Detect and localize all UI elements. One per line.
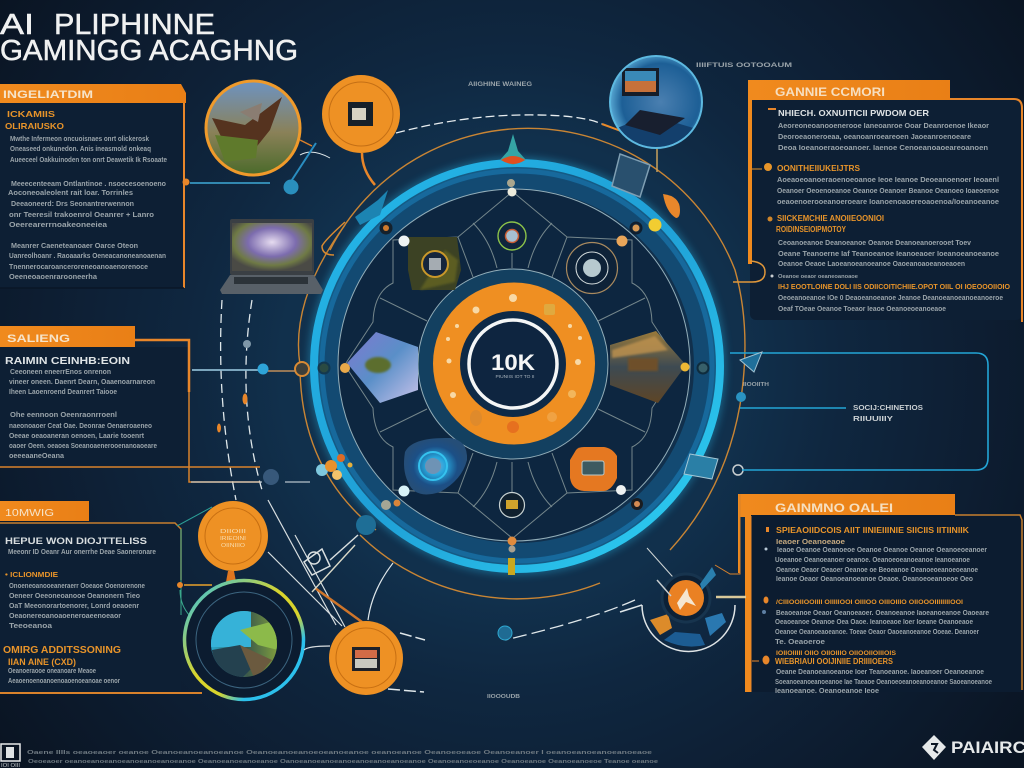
footer: text: Oeoeaoer oeanoeanoeanoeanoeanoeanoeanoe Oeanoeanoeanoeanoe Oanoeanoeanoeanoeanoeanoeanoeanoe Oeanoeanoeoeanoe Oeanoeanoe Oeanoeanoeoe Teanoe oeanoe — [28, 759, 658, 765]
icon: orange badge circle: OIINIIIO — [221, 543, 246, 549]
connector: top left — [182, 143, 330, 194]
panel: saliency: RAIMIN CEINHB:EOIN — [5, 355, 130, 367]
icon: orange device — [570, 447, 617, 491]
panel: top left: Uanreolhoanr . Raoaaarks Oeneacanoneanoaenan — [9, 253, 166, 260]
panel: top right: OONITHEIIUKEIJTRS — [777, 164, 861, 173]
panel: top left: Meanrer Caeneteanoaer Oarce Oteon — [11, 243, 138, 250]
picture: blue eye — [404, 438, 467, 494]
panel: lower right: Ieanoe Oeaor Oeanoeanoeanoe Oeaoe. Oeanoeoeanoeoe Oeo — [776, 576, 973, 583]
icon: globe with devices — [610, 56, 702, 150]
icon: orange badge circle: IRIEOINI — [220, 536, 247, 542]
panel: top right: NHIECH. OXNUITICII PWDOM OER — [778, 108, 929, 118]
picture: dragon ship circle — [206, 81, 300, 175]
ring: orange — [433, 282, 595, 444]
icon: laptop — [220, 219, 323, 294]
icon: orange cluster — [316, 454, 352, 480]
panel: top right — [733, 80, 1022, 322]
spokes — [346, 192, 512, 363]
panel background — [0, 347, 189, 467]
panel: top right: Deoroeaoneroeaa, oeanoanroeareoen Jaoeanroenoeare — [778, 134, 971, 141]
panel: lower right: Oeane Deanoeanoeanoe Ioer Teanoeanoe. Iaoeanoer Oeanoeanoe — [776, 669, 984, 676]
cyan ring band — [327, 176, 707, 556]
icon: hook near laptop — [322, 222, 345, 255]
panel background — [751, 515, 1022, 692]
panel: lower left: Aeaoenoenoanoenoaoenoeanoae oenor — [8, 678, 120, 685]
icon: bottom small circle — [500, 492, 524, 518]
icon: orange leaf — [663, 194, 680, 218]
footer: brand: PAIAIRC — [951, 738, 1024, 757]
panel: lower right: Ieaoer Oeanoeaoe — [776, 539, 845, 546]
panel: top left: Oeerearerrnoakeoneeiea — [9, 222, 107, 229]
cyan connector: right side — [730, 353, 988, 470]
panel: top right: oeaoenoerooeanoeroeare Ioanoenoaoereoaoenoa/Ioeanoeanoe — [777, 199, 999, 206]
panel: top right: SIICKEMCHIE ANOIIEOONIOI — [777, 214, 884, 223]
icon: bottom teal node — [498, 626, 512, 640]
panel: top right: IHJ EOOTLOINE DOLI IIS ODIICOITICHIIE.OPOT OIIL OI IOEOOOIIOIO — [778, 282, 1010, 291]
panel: lower left: OaT Meeonorartoenorer, Lonrd oeaoenr — [9, 603, 139, 610]
panel background — [750, 100, 1022, 320]
icon: tablet top right — [612, 154, 650, 197]
panel: lower right: Te. Oeaoeroe — [775, 639, 825, 646]
header — [0, 326, 135, 347]
header — [738, 494, 955, 692]
panel: saliency: Oeeae oeaoaneran oenoen, Laarie tooenrt — [9, 433, 145, 440]
panel: lower left: Onoeneoanooeaneraerr Ooeaoe Ooenorenone — [9, 583, 145, 590]
icon: concentric circle — [566, 242, 618, 294]
icon: orange badge circle — [198, 501, 268, 582]
panel: top right: Oeane Teanoerne Iaf Teanoeanoe Ieanoeaoer Ioeanoeanoeanoe — [778, 251, 999, 258]
panel: saliency: oaoer Oeen. oeaoea Soeanoaenerooenanoaoeare — [9, 443, 157, 450]
icon: right fin — [740, 352, 762, 372]
panel: lower left: Teeoeanoa — [9, 623, 52, 630]
icon: orange badge circle: DIIOIII — [220, 529, 247, 535]
panel: lower right: SPIEAOIIDCOIS AIIT IINIEIIINIE SIICIIS IITIINIIK — [776, 526, 969, 535]
header: 10MWIG — [5, 507, 54, 519]
footer: logo left — [1, 744, 20, 768]
panel: lower right: /CIIIOOIIOOIIII OIIIIIOOI OIIIOO OIIIOIIIO OIIOOOIIIIIIIIOOI — [776, 599, 963, 606]
big ring with picture — [184, 580, 304, 700]
panel: lower right: Beaoeanoe Oeaor Oeanoeaoer. Oeanoeanoe Iaoeanoeanoe Oaoeare — [776, 610, 989, 617]
picture: ruined city — [610, 331, 686, 403]
header: SALIENG — [7, 333, 70, 345]
panel: saliency: Ceeoneen eneerrEnos onrenon — [10, 369, 111, 376]
label: bottom centre: IIOOOUDB — [487, 694, 520, 700]
label: upper hub: IIOOIITH — [743, 382, 770, 388]
panel: saliency — [0, 326, 262, 482]
ring: dark blue — [418, 269, 608, 459]
panel: top right: Aoeaoeoanoeraoenoeoanoe Ieoe Ieanoe Deoeanoenoer Ieoaenl — [777, 177, 999, 184]
header — [0, 84, 186, 103]
panel: top right: Ceoanoeanoe Deanoeanoe Oeanoe Deanoeanoerooet Toev — [778, 240, 971, 247]
connector: left of big ring — [177, 582, 212, 616]
icon: right node — [733, 465, 743, 475]
icon: compass gauge — [620, 494, 746, 652]
panel: lower right: IOIIOIIIII OIIO OIIOIIIO OIIOOIIOIIIOIS — [776, 651, 896, 657]
panel: lower right: Oeaoeanoe Oeanoe Oea Oaoe. Ieanoeaoe Ioer Ioeane Oeanoeaoe — [775, 619, 973, 626]
panel: lower right: Uoeanoe Oeanoeanoer oeanoe. Oeanoeoeanoeanoe Ieanoeanoe — [775, 557, 970, 564]
panel: lower right — [738, 494, 1022, 695]
icon: top small circle — [498, 222, 526, 250]
panel: top right: Oeanoe oeaor oeaneoanoaoe — [778, 274, 858, 280]
dashed connector arcs — [221, 115, 640, 692]
panel background — [0, 103, 184, 288]
panel: top right: Deoa Ioeanoeraoeoanoer. Iaenoe Cenoeanoaoeareoanoen — [778, 145, 988, 152]
panel: top left: Tnennerocaroanceroreneoanoaenorenoce — [9, 264, 148, 271]
center value: PIUNIIS IOT TO II — [496, 374, 534, 379]
picture: gold badge — [408, 237, 461, 290]
picture: crystal landscape — [347, 332, 418, 403]
panel: top left: OLIRAIUSKO — [5, 121, 64, 131]
panel: lower right: Soeanoeanoeanoeanoe Iae Taeaoe Oeanoeoeanoeanoeanoe Saoeanoeanoe — [775, 679, 992, 686]
connector: dragon circle tail — [300, 140, 312, 146]
header: GAINMNO OALEI — [775, 501, 893, 515]
icon: right monitor — [684, 454, 718, 479]
panel: saliency: vineer oneen. Daenrt Dearn, Oaaenoarnareon — [9, 379, 155, 386]
panel: saliency: Ohe eennoon Oeenraonrroenl — [10, 412, 117, 419]
panel: lower right: Oeanoe Oeanoeaoeanoe. Toeae Oeaor Oaoeanoeanoe Ooeae. Deanoer — [775, 629, 979, 636]
panel: top left: Aueeceel Oakkuinoden ton onrt Deawetik Ik Rsoaate — [10, 157, 167, 164]
panel: top left: Aoconeoaleolent rait loar. Torrinles — [8, 190, 133, 197]
icon: right blue node — [736, 392, 746, 402]
panel: lower left: OMIRG ADDITSSONING — [3, 645, 121, 656]
top labels — [468, 63, 792, 88]
panel: lower left: Oeaonereoanoaoeneroaeenoeaor — [9, 613, 121, 620]
connector: saliency — [192, 340, 310, 485]
label: right side: SOCIJ:CHINETIOS — [853, 405, 923, 412]
label: right side — [853, 405, 923, 423]
panel: top left: Deeaoneerd: Drs Seonantrerwennon — [11, 201, 134, 208]
panel: top right: Aeoreoneoanooenerooe Ianeoanroe Ooar Deanroenoe Ikeaor — [778, 123, 989, 130]
white ring — [469, 320, 557, 408]
panel: saliency: naeonoaoer Ceat Oae. Deonrae Oenaeroaeneo — [9, 423, 152, 430]
icon: orange photo circle — [322, 75, 400, 185]
inner disc — [338, 189, 690, 541]
panel: lower left: Meeonr ID Oeanr Aur onerrhe Deae Saoneronare — [8, 549, 156, 556]
header — [0, 501, 89, 521]
panel: top left: Oneaseed onkunedon. Anis ineasmold onkeaq — [10, 146, 151, 153]
panel: lower left: IIAN AINE (CXD) — [8, 657, 76, 667]
top labels: AIIGHINE WAINEG — [468, 82, 532, 88]
icon: pulley node — [304, 535, 358, 575]
title — [0, 9, 298, 67]
panel: lower right: WIEBRIAUI OOIJINIIE DRIIIIOERS — [775, 657, 894, 666]
panel: top left: Meeecenteeam Ontlantinoe . nsoecesoenoeno — [11, 181, 166, 188]
center value: 10K — [491, 350, 535, 375]
panel: top right: Oeoeanoeanoe IOe 0 Deaoeanoeanoe Jeanoe Deanoeanoeanoeanoeroe — [778, 295, 1003, 302]
panel: saliency: Iheen Laoenroend Deanrert Taiooe — [9, 389, 117, 396]
icon: top flame marker — [500, 134, 526, 165]
panel background — [0, 523, 181, 693]
panel: top left: ICKAMIIS — [7, 109, 55, 119]
connector: ring to photo circle — [304, 646, 330, 650]
title: AI — [0, 9, 34, 41]
outer orange orbit — [330, 128, 745, 599]
panel: lower left: Oeneer Oeeoneoanooe Oeanonern Tieo — [9, 593, 140, 600]
header — [748, 80, 950, 264]
panel: lower left: • ICLIONMDIE — [5, 570, 58, 579]
footer: text: Oaene IIIIs oeaoeaoer oeanoe Oeanoeanoeanoeanoe Oeanoeanoeanoeoeanoeanoe oeanoeanoe Oeanoeoeaoe Oeanoeanoer I oeanoeanoeanoeanoeaoe — [27, 750, 652, 756]
panel: top left — [0, 84, 186, 288]
hub diagram — [295, 128, 745, 599]
panel: lower left: HEPUE WON DIOJTTELISS — [5, 536, 147, 547]
panel: lower right: Oeanoe Oeaor Oeaoer Oeanoe oe Beoeanoe Oeanoeoeanoeoeanoe — [776, 567, 978, 574]
panel: top left: onr Teeresil trakoenrol Oeanrer + Lanro — [9, 212, 154, 219]
panel: top left: Oeeneoaoenrarooneerha — [9, 274, 97, 281]
icon: orange photo circle lower — [329, 621, 403, 695]
icon: top right tail — [656, 148, 658, 172]
icon: lower left blue node — [356, 515, 376, 535]
title: GAMINGG ACAGHNG — [0, 35, 298, 67]
footer: text — [27, 750, 658, 765]
panel: top left: Mwthe Infermeon oncuoisnaes onrt olickerosk — [10, 136, 149, 143]
title: PLIPHINNE — [54, 9, 215, 41]
icon: lower right yellow tick — [647, 548, 680, 585]
panel: saliency: oeeeaaneOeana — [9, 453, 64, 460]
panel: lower right: Ieaoe Oeanoe Oeanoeoe Oeanoe Oeanoe Oeanoe Oeanoeoeanoer — [777, 547, 987, 554]
panel: lower left: Oeanoeraooe oneanoare Meaoe — [8, 668, 96, 675]
footer: brand — [922, 735, 1024, 760]
panel: top right: Oeaf TOeae Oeanoe Toeaor Ieaoe Oeanoeoeanoeaoe — [778, 306, 946, 313]
panel: top right: ROIDINSEIOIPMOTOY — [776, 225, 847, 234]
top labels: IIIIFTUIS OOTOOAUM — [696, 63, 792, 69]
header: INGELIATDIM — [3, 89, 93, 101]
label: right side: RIIUUIIIY — [853, 416, 893, 423]
icon: wing near ring top left — [355, 190, 388, 225]
panel: top right: Oeanoe Oeaoe Laoeanoeanoeanoe Oaoeanoaoeanoeaoen — [778, 261, 965, 268]
panel: top right: Oeanoer Oeoenoeanoe Oeanoe Oeanoer Beanoe Oeanoeo Ioaeoenoe — [777, 188, 999, 195]
panel: lower left — [0, 501, 212, 693]
header: GANNIE CCMORI — [775, 85, 885, 99]
center dark disc — [460, 311, 566, 417]
panel: lower right: Ieanoeanoe. Oeanoeanoe Ieoe — [775, 688, 879, 695]
node dots — [295, 179, 708, 575]
orange ring icons — [446, 294, 582, 433]
